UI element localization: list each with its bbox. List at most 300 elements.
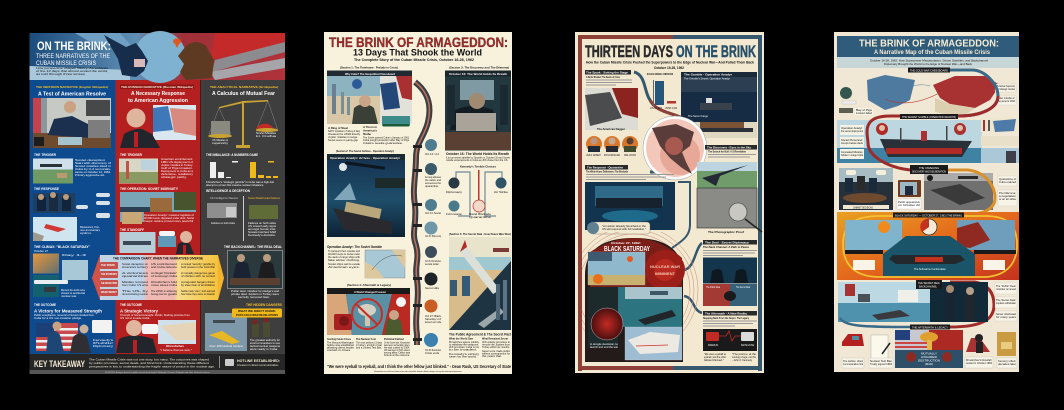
trigger russian: American encirclement:	[161, 157, 193, 161]
secret gamble band: troops below deck	[841, 141, 864, 145]
nuclear arsenal bar chart: USSR 3,332	[665, 106, 677, 110]
black saturday dome	[585, 238, 685, 362]
quote: "We were eyeball to eyeball, and I think the other fellow just blinked." - Dean Rusk, US Secretary of State	[327, 364, 511, 369]
climax west: October 27	[34, 249, 48, 253]
operation russian: THE OPERATION: SOVIET INGENUITY	[120, 187, 178, 191]
section 1 panel: Why Cuba? The Geopolitical Chessboard	[345, 72, 395, 76]
mutually assured destruction panel: MUTUALLY	[921, 352, 937, 356]
section 1 panel: (Section 1: The Timeframe - Prelude to Crisis)	[340, 66, 398, 70]
band text columns: demonstrating resolve	[122, 292, 148, 296]
climax west: closest to accidental	[61, 291, 85, 295]
operation russian	[120, 187, 196, 224]
Kennedy choices diagram: Diplomacy	[446, 190, 463, 194]
label: cold war chessboard: THE COLD WAR CHESSBOARD	[910, 68, 949, 72]
hidden dangers: The greatest authority for	[250, 338, 280, 342]
road: secret deal loop	[880, 282, 994, 327]
poster background	[575, 32, 764, 373]
operation russian: troops' resolve proved more powerful.	[144, 219, 194, 223]
response west: Measured, firm,	[80, 225, 100, 229]
timeline stop markers and icons: Oct 26: Khrushchev	[425, 259, 441, 263]
road: right curve to black saturday	[948, 170, 995, 214]
cold war world map: Jupiter missiles in	[996, 96, 1015, 100]
outcome russian: Khrushchev	[166, 344, 184, 348]
notes: secret deal: Never disclosed	[996, 312, 1016, 316]
section 3 lower panel: missile image	[449, 232, 511, 330]
section 1 panel: A Thorn in	[363, 125, 377, 129]
intelligence and deception: US missed early signs	[248, 224, 277, 228]
band text columns: The US, by	[122, 289, 149, 293]
key takeaway footer: by public promises, secret deals, and blind luck. Understanding these different	[89, 361, 209, 365]
band text columns: The USSR, in achieving	[151, 289, 177, 293]
outcome west: A Victory for Measured Strength	[34, 308, 102, 314]
band text columns: A mutual "security" gamble by	[181, 262, 216, 266]
band text columns	[122, 262, 216, 296]
submarine sea panel	[883, 236, 975, 276]
intro text: How perspective shapes history: An analysis	[36, 66, 109, 70]
key takeaway footer: A lesson in direct communication.	[237, 363, 279, 367]
section 4 panel: a world changed forever: hotline was established	[327, 343, 354, 347]
secret diplomacy section: The Secret Deal	[736, 285, 750, 289]
key takeaway footer: KEY TAKEAWAY	[34, 359, 85, 369]
trigger west: Soviet deception	[75, 158, 106, 162]
road: bottom left curve	[840, 318, 910, 327]
clock red wedge	[920, 219, 929, 232]
icon: mushroom cloud on globe	[173, 38, 181, 48]
outcome west: Public	[93, 341, 115, 345]
note left	[853, 260, 875, 270]
notes: secret deal: The Secret Deal:	[996, 298, 1016, 302]
operation anadyr text and map	[327, 245, 405, 278]
section 4 panel: a world changed forever	[327, 283, 410, 357]
section 4 panel: a world changed forever: JFK was seen in high esteem	[384, 348, 410, 352]
bottom border blue	[673, 366, 761, 370]
secret gamble band: the secret deployment	[841, 129, 863, 133]
trigger russian	[119, 153, 194, 184]
scale illustration: in Cuba	[256, 134, 277, 138]
icon: eagle	[104, 35, 148, 77]
outcome russian: A Strategic Victory	[120, 308, 158, 314]
section 1 panel: threatens the USSR directly	[328, 132, 361, 136]
clock icon	[921, 219, 937, 235]
timeline stop markers and icons: Oct 27: Black	[425, 314, 442, 318]
timeline stop markers and icons: quarantine.	[425, 184, 439, 188]
black saturday dome: October 27, 1962:	[611, 241, 641, 245]
western heading: A Test of American Resolve	[38, 92, 106, 98]
response section: The White House Deliberates: The Blockade	[586, 170, 628, 174]
trigger russian: Gulf of Pigs invasion.	[161, 166, 193, 170]
outcome west	[34, 303, 115, 353]
hidden dangers: Over 100 tactical nuclear	[209, 344, 243, 348]
trigger russian: defensive, retaliatory	[161, 172, 194, 176]
panel: analytical narrative column background	[201, 80, 285, 354]
black saturday dome: NUCLEAR WAR	[650, 264, 680, 269]
russian heading: to American Aggression	[128, 98, 188, 104]
Kennedy choices diagram: Full Invasion	[446, 212, 462, 216]
section 1 panel: Soviet sees no parity gap	[328, 138, 358, 142]
intelligence and deception: Kennedy's decision.	[248, 233, 276, 237]
intelligence and deception	[206, 189, 281, 241]
outcome west: Cuba for a US non-invasion pledge.	[34, 316, 82, 320]
public agreement and secret pact: Khrushchev agrees publicly	[449, 340, 480, 344]
black saturday dome: A single decision to	[590, 342, 619, 346]
band title: THE COMPARISON CHART: WHEN THE NARRATIVES DIVERGE	[113, 256, 203, 260]
intro band: Diplomacy Brought the World to the Edge of Nuclear War—and Back	[884, 62, 973, 66]
intelligence and deception: US Intelligence Wasnes	[210, 196, 239, 200]
intro text 3: as told through three lenses.	[36, 72, 86, 76]
notes: discovery: a negotiation	[999, 194, 1016, 198]
outcome west: Kennedy's	[93, 338, 114, 342]
trigger west: Soviet missiles sited in	[75, 164, 112, 168]
cold war world map: US Nuclear Superiority	[996, 84, 1015, 88]
aftermath section: The Aftermath - A New Reality	[705, 312, 747, 316]
band text columns: America's territory	[122, 265, 149, 269]
text: submarine: The Submarine Confrontation	[914, 267, 946, 271]
label: cold war chessboard	[908, 68, 950, 72]
Kennedy choices diagram: Air Strike	[494, 190, 509, 194]
poster 2: The Brink of Armageddon, 13 days	[324, 32, 512, 374]
public agreement and secret pact: Never to be made public	[482, 349, 511, 353]
captions: phone and treaty: The Hotline: direct	[843, 359, 863, 363]
explosion	[878, 221, 890, 233]
band text columns: by sheer fear of annihilation	[181, 283, 215, 287]
scale illustration	[208, 100, 278, 148]
trigger west: Primary aggressive act.	[75, 173, 105, 177]
captions: phone and treaty	[842, 358, 893, 368]
icon: bear	[178, 42, 214, 80]
shadow figure and notes: Khrushchev's Downfall:	[966, 358, 992, 362]
section 4 panel: a world changed forever: The Moscow-Washington	[327, 340, 354, 344]
response west	[33, 187, 110, 241]
operation anadyr text and map: 40,000 troops to Cuba under	[328, 252, 360, 256]
portraits: NIKITA KHRUSHCHEV	[604, 153, 620, 157]
outcome west: THE OUTCOME	[34, 303, 56, 307]
icon: globe	[134, 31, 186, 83]
mutually assured destruction panel: DESTRUCTION	[918, 358, 940, 362]
notes: secret deal: missiles removed	[996, 287, 1016, 291]
panel: russian narrative column background	[116, 80, 200, 354]
timeline stop markers and icons: Oct 24: Soviet	[425, 211, 441, 215]
climax west: THE CLIMAX: "BLACK SATURDAY"	[34, 245, 90, 249]
road red segment	[650, 100, 704, 150]
tagline: The Complete Story of the Cuban Missile Crisis, October 16-28, 1962	[354, 58, 474, 62]
image: Khrushchev and Europe map	[120, 105, 196, 148]
intro band: October 16-28, 1962: How Superpower Miscalculation, Secret Gambles, and Backchannel	[870, 58, 988, 62]
cold war world map: Turkey aimed at USSR	[996, 99, 1015, 103]
portraits: JOHN F. KENNEDY	[586, 153, 601, 157]
icon: small us flag	[134, 59, 145, 67]
Kennedy choices diagram	[446, 164, 509, 219]
black saturday dome: launch and end the war	[590, 345, 618, 349]
climax west	[33, 245, 90, 298]
band text columns: Missiles removed	[122, 280, 149, 284]
icon: television	[897, 180, 921, 209]
section 2 panel: Operation Anadyr: (Section 2: The Secret Airlines - Operation Anadyr)	[336, 149, 394, 153]
secret gamble band: Operation Anadyr:	[841, 126, 863, 130]
poster 4: The Brink of Armageddon, narrative map	[834, 32, 1019, 372]
band row labels: WHO WON?	[101, 290, 117, 294]
section: the spark	[585, 70, 638, 131]
gamble panel: dark ocean: The Kremlin's Secret: Operation Anadyr	[684, 76, 730, 80]
timeline stop markers and icons: Oct 14: U-2	[425, 152, 439, 156]
section 4 panel: a world changed forever: was seen as backing down.	[384, 343, 410, 347]
section: the spark: A World Divided: The Seeds of Crisis	[586, 75, 620, 79]
bottom border red	[578, 366, 673, 370]
aftermath section: WHITE HOUSE	[741, 343, 754, 347]
nuclear arsenal bar chart	[647, 72, 677, 110]
secret diplomacy section: The Deal - Secret Diplomacy	[705, 240, 749, 244]
response west: THE RESPONSE	[34, 187, 59, 191]
icon: treaty document	[871, 335, 890, 359]
section 3 lower panel: missile image: (Section 3: The Secret Deal - How Peace Was Won)	[449, 232, 511, 236]
band text columns: move saves Cuba	[151, 283, 178, 287]
discovery section	[697, 145, 762, 234]
climax west: Moment the world came	[61, 288, 85, 292]
captions: phone and treaty: Treaty signed 1963	[870, 362, 892, 366]
title: THIRTEEN DAYS	[585, 42, 673, 61]
discovery: meeting table image	[839, 168, 893, 210]
hidden dangers: local commanders to use	[250, 341, 280, 345]
scale illustration: US Missiles &	[212, 138, 228, 142]
hidden dangers	[205, 303, 282, 351]
operation anadyr text and map: the deck of cargo ships with	[328, 255, 360, 259]
label: the unveiling: DISCOVERY AND DELIBERATION	[912, 170, 946, 174]
image: Kennedy in oval office	[33, 98, 111, 148]
label: secret deal	[916, 280, 942, 289]
soviet region on map	[957, 222, 990, 248]
hidden dangers: WHAT WE DIDN'T KNOW:	[238, 309, 276, 313]
trigger russian: THE TRIGGER	[120, 153, 142, 157]
title: ON THE BRINK:	[37, 39, 111, 53]
black saturday dome: IMMINENT	[655, 271, 676, 276]
aftermath section: fellow blinked."	[704, 358, 724, 362]
submarine	[889, 255, 965, 264]
image: U-2 shot down	[845, 220, 902, 250]
band text columns: how close they came to disaster	[181, 292, 215, 296]
secret diplomacy section	[703, 240, 757, 306]
section 4 panel: a world changed forever: and a Limited Test Ban.	[356, 346, 382, 350]
operation anadyr text and map: To transport their missiles and	[328, 249, 360, 253]
trigger west: THE TRIGGER	[34, 153, 56, 157]
section 1 panel: Side	[363, 132, 371, 136]
discovery section: The Search for Bull: U-2 Revelation	[708, 150, 746, 154]
standoff russian	[120, 228, 194, 254]
mutually assured destruction panel: (MAD)	[925, 362, 933, 366]
notes: discovery: or an air strike	[999, 197, 1016, 201]
public agreement and secret pact: JFK quietly promises to	[482, 340, 510, 344]
key takeaway footer: The Cuban Missile Crisis was not one story, but many. The outcomes was shaped	[89, 358, 209, 362]
aftermath section: "The point is, at the	[732, 352, 756, 356]
notes: discovery: Quarantine of	[999, 177, 1016, 181]
timeline stop markers and icons: Secret talks	[425, 286, 440, 290]
climax west: nuclear war.	[61, 294, 77, 298]
intelligence and deception: amongst human intel.	[248, 227, 276, 231]
section 4 panel: a world changed forever: Political Fallout	[384, 337, 404, 341]
timeline road centre line	[414, 82, 429, 345]
aftermath section: KREMLIN	[708, 343, 718, 347]
section 1 panel: America's	[363, 128, 377, 132]
caption right	[974, 250, 1016, 254]
map circle: missile range	[643, 116, 707, 180]
key takeaway footer: HOTLINE ESTABLISHED:	[237, 359, 280, 363]
winding timeline road	[414, 82, 429, 345]
backchannel: THE BACKCHANNEL: THE REAL DEAL	[224, 245, 283, 249]
response section	[585, 165, 675, 234]
section 1 panel: NATO missiles in Turkey & Italy	[328, 129, 360, 133]
notes: secret deal: for many years	[996, 315, 1017, 319]
trigger west: Cuba by U-2 reconnais-	[75, 167, 111, 171]
note right	[983, 260, 1005, 270]
hidden dangers: tactical nuclear weapons	[250, 344, 281, 348]
red alert on submarine	[915, 257, 943, 262]
section 4 panel: a world changed forever: among allies; Castro was	[384, 350, 410, 354]
poster 1: On the Brink, three narratives	[30, 31, 285, 374]
gamble panel: dark ocean	[681, 72, 757, 138]
response west: non-involuntary	[80, 228, 101, 232]
key takeaway footer: SOURCES: Analysis based on public records from English Wikipedia, Russian Wikipedia and other historical sources.	[105, 371, 210, 374]
cold war world map: Bay of Pigs	[856, 108, 873, 112]
section: the spark: The Spark - Setting the Stage	[586, 70, 628, 74]
section 3 top panel: Kennedy: (Section 3: The Discovery and The Dilemma)	[449, 66, 509, 70]
trigger russian: 1961 US deployment of	[161, 160, 193, 164]
portraits: FIDEL CASTRO	[624, 153, 636, 157]
section 1 panel	[327, 66, 412, 145]
outcome west: Public compliance: removal of Soviet missiles from	[34, 313, 95, 317]
title: THE BRINK OF ARMAGEDDON:	[329, 34, 508, 50]
standoff russian: THE STANDOFF	[120, 228, 145, 232]
label: secret gamble	[900, 114, 958, 119]
section 4 panel: a world changed forever: A World Changed Forever	[354, 290, 387, 294]
section 2 panel: Operation Anadyr: Operation Anadyr: Arrives - Operation Anadyr	[330, 156, 401, 160]
western heading	[36, 85, 108, 98]
subtitle line 1: THREE NARRATIVES OF THE	[36, 54, 110, 60]
comparison band with arrow ends	[92, 255, 224, 300]
band text columns: of sovereign Cuba	[151, 274, 178, 278]
poster background	[834, 32, 1019, 372]
road red segment	[958, 96, 998, 116]
cold war world map: and strategic missiles	[996, 87, 1015, 91]
section 4 panel: a world changed forever: furious at the outcome.	[384, 353, 410, 357]
aerial reconnaissance photo	[924, 173, 993, 210]
imbalance bar chart: attempt to correct this massive nuclear imbalance.	[206, 183, 264, 187]
timeline stop markers and icons: sends letter	[425, 262, 439, 266]
response section: US will respond with full retaliation."	[602, 227, 646, 231]
band row labels	[101, 263, 117, 294]
trigger russian: strategic parity.	[161, 175, 187, 179]
public agreement and secret pact: Turkey within six months.	[482, 345, 510, 349]
header band	[837, 36, 1019, 57]
secret gamble band	[837, 120, 982, 163]
notes: discovery: Cuba ordered	[999, 180, 1016, 184]
timeline stop markers and icons: Kennedy addresses	[425, 175, 441, 179]
aftermath section: coming of age, not the	[732, 355, 756, 359]
panel: western narrative column background	[30, 80, 116, 354]
outcome west: Diplomacy	[93, 344, 114, 348]
outcome russian: "I believe that we won."	[160, 348, 192, 352]
aftermath section: Stepping Back From the Abyss: The Legacy	[703, 316, 749, 320]
black saturday dome: BLACK SATURDAY	[604, 246, 650, 253]
public agreement and secret pact: JFK promises: Cuba is not	[449, 345, 479, 349]
winding road: cold war to secret gamble	[950, 70, 998, 116]
outcome russian: THE OUTCOME	[120, 303, 142, 307]
band text columns: An illegal "blockade"	[151, 271, 177, 275]
section 4 panel: a world changed forever: He was ousted by 1964.	[384, 346, 410, 350]
section 4 panel: a world changed forever: allowing direct leader	[327, 346, 354, 350]
mutually assured destruction panel	[895, 330, 963, 368]
timeline stop markers and icons: Oct 25: Ships stop	[425, 234, 441, 238]
response section: "An action already launched or the	[602, 224, 646, 228]
operation anadyr text and map: Operation Anadyr: The Soviet Gamble	[327, 245, 382, 249]
section 4 panel: a world changed forever: The Nuclear Cost	[356, 337, 376, 341]
public agreement and secret pact: The Public Agreement & The Secret Pact	[449, 332, 512, 336]
captions: phone and treaty: communication link	[843, 362, 863, 366]
caption left	[845, 250, 883, 254]
analytical heading	[210, 85, 278, 97]
intelligence and deception: INTELLIGENCE & DECEPTION	[206, 189, 250, 193]
intro band	[837, 57, 1019, 68]
right panel: missile map and troops	[981, 118, 1019, 163]
header band: THE BRINK OF ARMAGEDDON:	[859, 38, 999, 50]
cold war world map	[839, 75, 1016, 115]
discovery section: The Discovery - Eyes in the Sky	[707, 146, 751, 150]
left border red	[578, 35, 582, 371]
timeline stop markers and icons: Oct 28: Resolution	[425, 348, 441, 352]
intro text 2: of the 13 days that almost ended the world,	[36, 69, 108, 73]
band text columns: A victorious	[122, 271, 149, 275]
shadow figure and notes	[965, 334, 993, 368]
timeline stop markers and icons: Crisis ends	[425, 351, 440, 355]
public agreement and secret pact	[449, 332, 512, 358]
band text columns: A mutually dangerous game	[181, 271, 215, 275]
icon: television: on October 22	[898, 203, 921, 207]
intelligence and deception: Soviet Maskirovka Failures	[248, 196, 281, 200]
mutually assured destruction panel: ASSURED	[921, 355, 937, 359]
image: soviet map	[957, 220, 1015, 250]
secret diplomacy section: The Public Deal	[706, 285, 720, 289]
subtitle line 2: CUBAN MISSILE CRISIS	[36, 61, 96, 67]
section 1 panel: The Soviet opened Cuba in January of 1961	[363, 136, 409, 140]
cold war world map: invasion failed	[856, 111, 872, 115]
label: the unveiling: THE UNVEILING	[919, 166, 939, 170]
hidden dangers: THE HIDDEN DANGERS	[246, 303, 282, 307]
operation anadyr text and map: fake winter clothing.	[328, 258, 360, 262]
trigger west: Start with discovery of	[75, 161, 111, 165]
outcome russian: US not to invade Cuba.	[120, 316, 150, 320]
Kennedy choices diagram: Quarantine	[469, 215, 492, 219]
public agreement and secret pact: to withdraw the weapons.	[449, 342, 479, 346]
response section: The Response - Quarantine	[587, 166, 623, 170]
Kennedy choices diagram: Kennedy's Terrible Choices	[460, 164, 496, 168]
section 1 panel: Cuba sought protection after Bay of Pigs	[363, 138, 410, 142]
band text columns: long-term goals	[151, 292, 178, 296]
public agreement and secret pact: What the World Saw	[449, 336, 473, 340]
red radar rings around the dome	[582, 232, 698, 332]
public agreement and secret pact: to be invaded.	[449, 348, 477, 352]
scale illustration: superiority	[212, 141, 229, 145]
aftermath section	[703, 311, 757, 362]
secret deal map panel	[838, 282, 930, 322]
operation russian: Operation Anadyr: massive logistics of	[144, 213, 194, 217]
discovery section: The Photographic Proof	[708, 230, 745, 234]
key takeaway footer	[30, 354, 285, 374]
notes: discovery	[998, 176, 1017, 206]
trigger russian: Jupiter missiles in Turkey.	[161, 163, 193, 167]
band text columns: Soviet deception on	[122, 262, 148, 266]
label: secret gamble: THE SECRET GAMBLE (OPERATION ANADYR)	[902, 115, 956, 119]
band row labels: THE SPARK	[101, 263, 115, 267]
timeline stop markers and icons: the nation and	[425, 178, 441, 182]
russian heading	[120, 84, 194, 104]
trigger west: sance on October 14, 1962.	[75, 170, 111, 174]
